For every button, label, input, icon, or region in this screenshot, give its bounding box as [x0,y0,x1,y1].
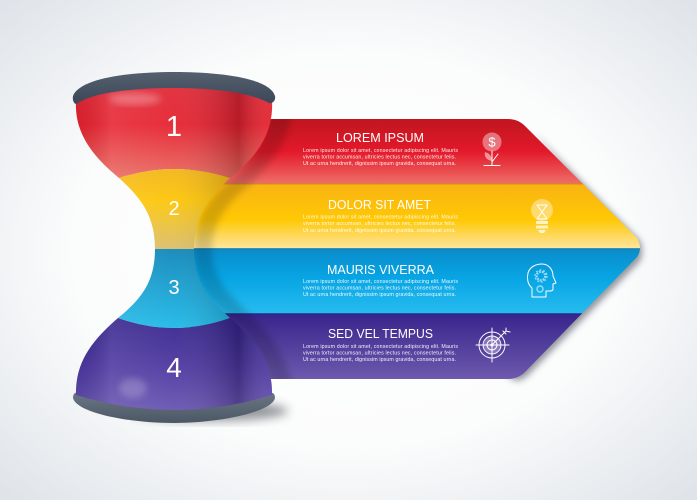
segment 3 blue [118,249,230,328]
arrow panels [190,110,650,385]
number 2: 2 [168,198,180,220]
segment 1 red [76,88,272,178]
panel: yellow band [190,184,650,249]
text block 2 [303,197,458,234]
icon: target with arrow [476,328,510,362]
text block 4 [303,326,458,363]
body 3: Ut ac urna hendrerit, dignissim ipsum gravida, consequat urna. [303,292,456,298]
number 4: 4 [166,352,182,383]
heading 3: MAURIS VIVERRA [327,262,434,277]
panel: purple band [190,314,582,379]
text block 1 [303,130,458,167]
panel: blue band [190,249,650,314]
glass body [76,88,272,410]
top rim [73,72,275,104]
body 2: viverra tortor accumsan, ultricies lectus nec, consectetur felis. [303,221,456,227]
body 1: Ut ac urna hendrerit, dignissim ipsum gravida, consequat urna. [303,161,456,167]
number 1: 1 [166,111,182,143]
segment 4 purple [76,318,272,410]
body 4: Ut ac urna hendrerit, dignissim ipsum gravida, consequat urna. [303,357,456,363]
segment 2 yellow [119,169,230,249]
bottom rim [73,393,275,423]
heading 1: LOREM IPSUM [336,130,424,145]
body 3: viverra tortor accumsan, ultricies lectus nec, consectetur felis. [303,286,456,292]
icon: money plant: $ [488,134,496,150]
icon: money plant [482,132,502,166]
hourglass [72,72,276,423]
body 3: Lorem ipsum dolor sit amet, consectetur adipiscing elit. Mauris [303,279,458,285]
panel: red band [190,119,583,184]
arrow drop shadow [504,133,642,381]
ground shadow of hourglass [132,401,288,421]
body 2: Ut ac urna hendrerit, dignissim ipsum gravida, consequat urna. [303,228,456,234]
body 4: Lorem ipsum dolor sit amet, consectetur adipiscing elit. Mauris [303,344,458,350]
icon: head with gears [527,264,556,297]
body 2: Lorem ipsum dolor sit amet, consectetur adipiscing elit. Mauris [303,215,458,221]
body 1: viverra tortor accumsan, ultricies lectus nec, consectetur felis. [303,155,456,161]
body 4: viverra tortor accumsan, ultricies lectus nec, consectetur felis. [303,351,456,357]
heading 4: SED VEL TEMPUS [328,326,433,341]
body 1: Lorem ipsum dolor sit amet, consectetur adipiscing elit. Mauris [303,148,458,154]
icon: light bulb with hourglass [531,199,553,233]
heading 2: DOLOR SIT AMET [328,197,431,212]
text block 3 [303,262,458,298]
number 3: 3 [168,277,180,299]
